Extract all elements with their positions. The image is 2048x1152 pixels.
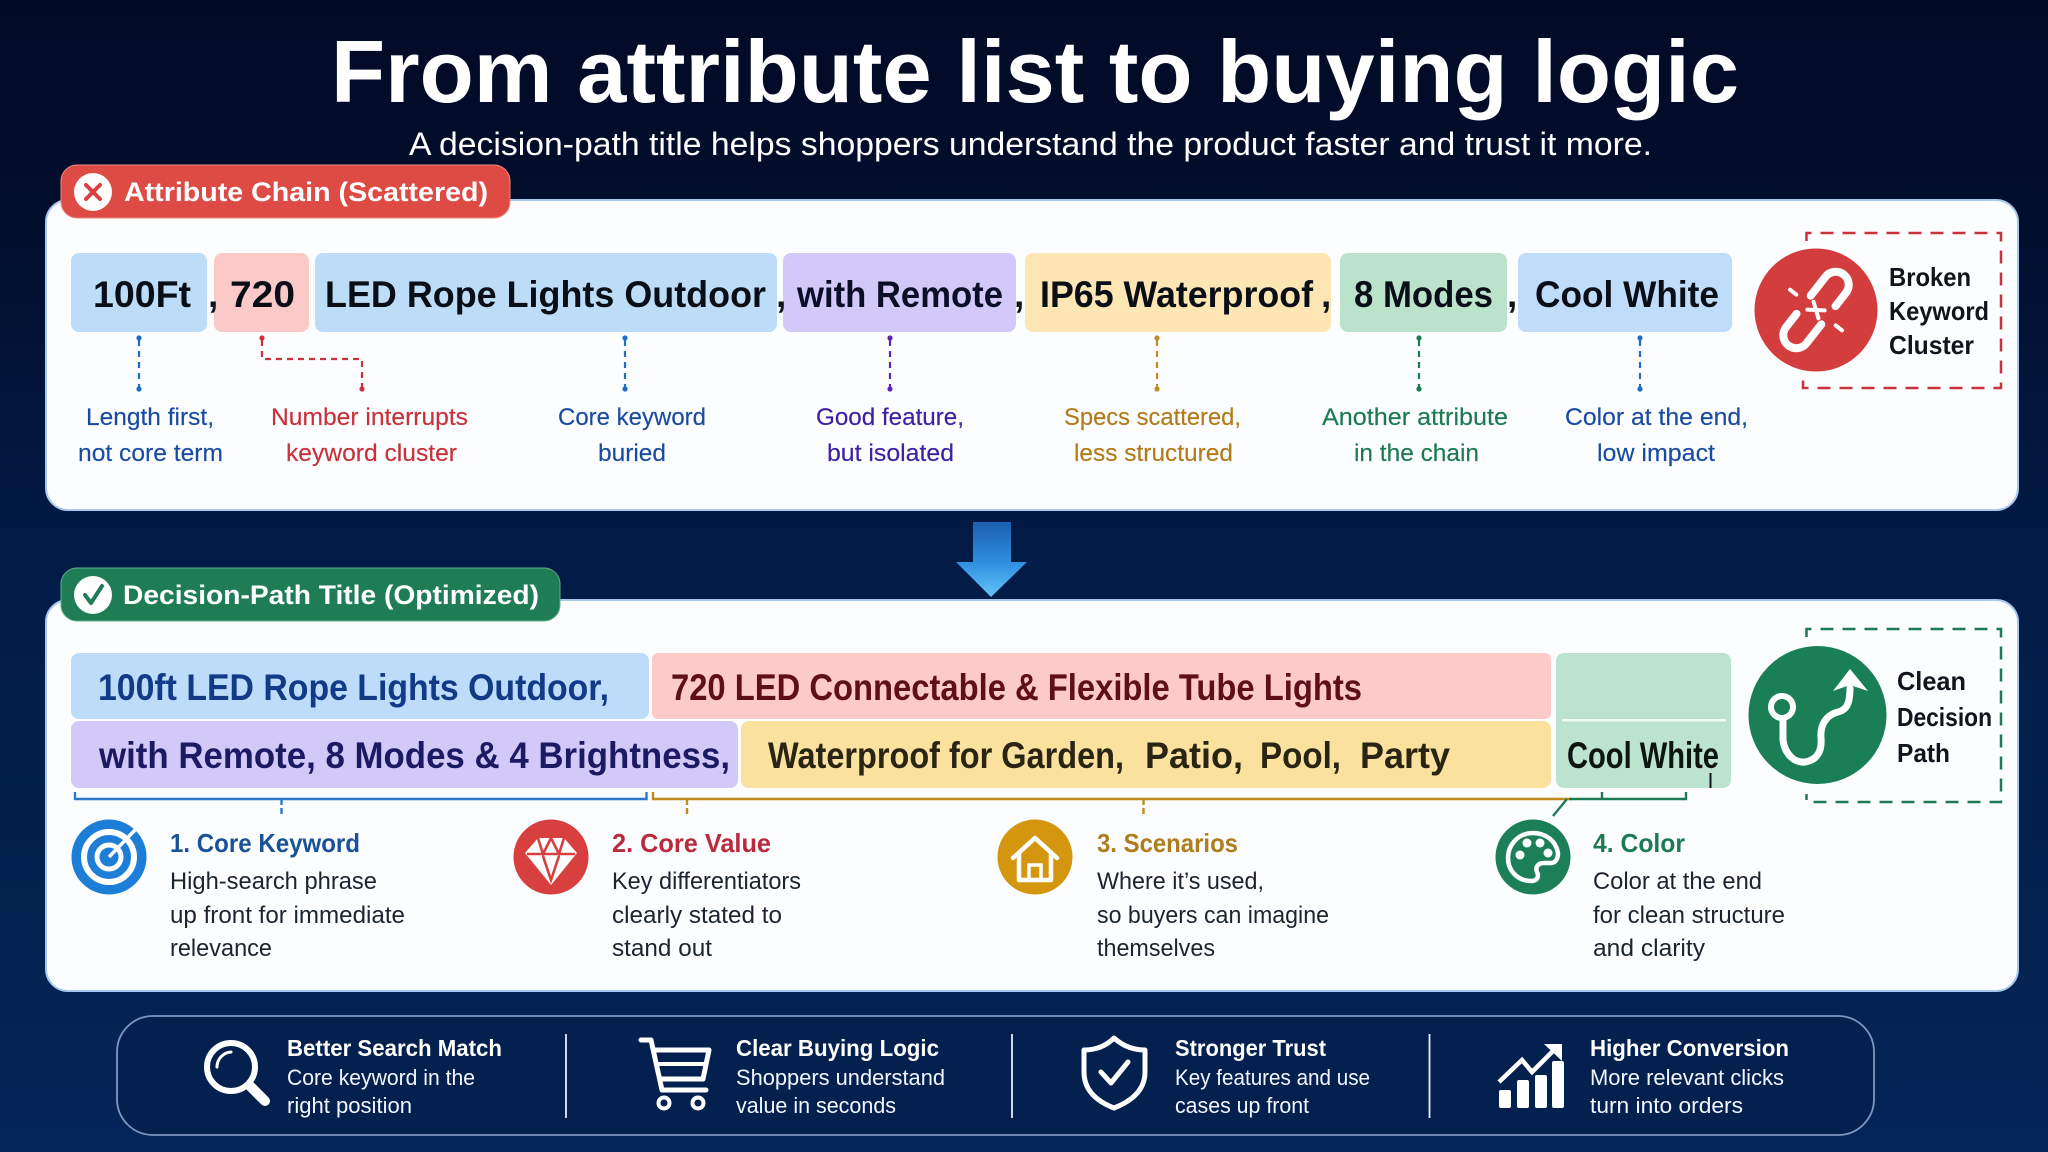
item: core value: stand out xyxy=(612,935,712,962)
icon: winding path xyxy=(1748,646,1886,784)
benefit: clear buying logic xyxy=(641,1035,945,1118)
optimized title blocks: 720 LED Connectable & Flexible Tube Lights xyxy=(671,667,1362,708)
callout: clean decision path: Decision xyxy=(1897,702,1992,732)
optimized title blocks: with Remote, 8 Modes & 4 Brightness, xyxy=(98,735,730,776)
item: core keyword xyxy=(72,820,405,962)
annotation: number interrupts: Number interrupts xyxy=(271,404,468,431)
attribute chips: 720 xyxy=(230,274,295,315)
callout: broken keyword cluster xyxy=(1754,233,2001,388)
annotation: specs scattered xyxy=(1064,404,1241,467)
annotation: core keyword: buried xyxy=(598,440,666,467)
icon: cart xyxy=(641,1040,709,1108)
callout: broken keyword cluster: Cluster xyxy=(1889,330,1974,360)
title: From attribute list to buying logic xyxy=(331,22,1739,121)
item: scenarios xyxy=(998,820,1329,962)
annotation: specs scattered: less structured xyxy=(1074,440,1233,467)
panel: attribute chain xyxy=(46,165,2018,510)
annotation: core keyword xyxy=(558,404,706,467)
item: core value: Key differentiators xyxy=(612,868,801,895)
attribute chips: with Remote xyxy=(796,274,1003,315)
item: core value: clearly stated to xyxy=(612,902,782,929)
optimized title blocks: Patio, xyxy=(1145,735,1243,776)
badge: decision-path title optimized xyxy=(61,568,560,621)
annotation: length first: not core term xyxy=(78,440,223,467)
annotation: good feature: Good feature, xyxy=(816,404,964,431)
annotation: color at the end: low impact xyxy=(1597,440,1715,467)
badge: decision-path title optimized: Decision-Path Title (Optimized) xyxy=(123,580,539,610)
benefit: stronger trust: cases up front xyxy=(1175,1093,1310,1118)
item: color: 4. Color xyxy=(1593,828,1685,858)
annotation: good feature xyxy=(816,404,964,467)
optimized title blocks: Cool White xyxy=(1567,735,1719,776)
panel: decision-path title xyxy=(46,568,2018,991)
benefit: stronger trust: Key features and use xyxy=(1175,1065,1370,1090)
annotation: length first: Length first, xyxy=(86,404,214,431)
item: color xyxy=(1496,820,1785,962)
dashed connectors xyxy=(136,335,1643,392)
item: core value: 2. Core Value xyxy=(612,828,771,858)
brackets xyxy=(75,792,1686,816)
callout: broken keyword cluster: Broken xyxy=(1889,262,1971,292)
annotation: core keyword: Core keyword xyxy=(558,404,706,431)
benefit: higher conversion: turn into orders xyxy=(1590,1093,1743,1118)
icon: growth chart xyxy=(1499,1044,1564,1108)
item: scenarios: Where it’s used, xyxy=(1097,868,1264,895)
attribute chips: LED Rope Lights Outdoor xyxy=(325,274,766,315)
annotation: length first xyxy=(78,404,223,467)
annotation: specs scattered: Specs scattered, xyxy=(1064,404,1241,431)
optimized title blocks: Waterproof for Garden, xyxy=(768,735,1124,776)
icon: target xyxy=(72,820,146,894)
item: color: for clean structure xyxy=(1593,902,1785,929)
icon: diamond xyxy=(514,820,588,894)
attribute chips: Cool White xyxy=(1535,274,1719,315)
item: color: Color at the end xyxy=(1593,868,1762,895)
attribute chips: , xyxy=(208,274,218,315)
benefit: clear buying logic: value in seconds xyxy=(736,1093,896,1118)
attribute chips: , xyxy=(1507,274,1517,315)
callout: broken keyword cluster: Keyword xyxy=(1889,296,1989,326)
annotation: another attribute: Another attribute xyxy=(1322,404,1508,431)
benefit: clear buying logic: Shoppers understand xyxy=(736,1065,945,1090)
callout: clean decision path: Path xyxy=(1897,738,1950,768)
benefit: clear buying logic: Clear Buying Logic xyxy=(736,1035,939,1061)
annotation: number interrupts: keyword cluster xyxy=(286,440,457,467)
panel: benefits bar xyxy=(117,1016,1874,1135)
item: color: and clarity xyxy=(1593,935,1706,962)
annotation: good feature: but isolated xyxy=(827,440,954,467)
item: core value xyxy=(514,820,801,962)
benefit: better search match: Core keyword in the xyxy=(287,1065,475,1090)
benefit: stronger trust: Stronger Trust xyxy=(1175,1035,1326,1061)
arrow: transition down xyxy=(956,522,1027,597)
item: core keyword: up front for immediate xyxy=(170,902,405,929)
annotation: color at the end: Color at the end, xyxy=(1565,404,1748,431)
optimized title blocks: 100ft LED Rope Lights Outdoor, xyxy=(98,667,609,708)
optimized title blocks xyxy=(71,653,1731,788)
annotation: number interrupts xyxy=(271,404,468,467)
annotation: color at the end xyxy=(1565,404,1748,467)
attribute chips: 8 Modes xyxy=(1354,274,1493,315)
item: core keyword: 1. Core Keyword xyxy=(170,828,360,858)
item: scenarios: so buyers can imagine xyxy=(1097,902,1329,929)
benefit: higher conversion: Higher Conversion xyxy=(1590,1035,1789,1061)
attribute chips: 100Ft xyxy=(93,274,191,315)
icon: palette xyxy=(1496,820,1570,894)
benefit: higher conversion: More relevant clicks xyxy=(1590,1065,1784,1090)
icon: broken link xyxy=(1754,248,1878,372)
badge: attribute chain scattered xyxy=(61,165,510,218)
badge: attribute chain scattered: Attribute Chain (Scattered) xyxy=(124,177,488,207)
benefit: better search match: right position xyxy=(287,1093,412,1118)
attribute chips: , xyxy=(1321,274,1331,315)
callout: clean decision path: Clean xyxy=(1897,666,1966,696)
attribute chips: , xyxy=(1014,274,1024,315)
item: scenarios: 3. Scenarios xyxy=(1097,828,1238,858)
optimized title blocks: Party xyxy=(1360,735,1450,776)
benefit: better search match: Better Search Match xyxy=(287,1035,502,1061)
item: scenarios: themselves xyxy=(1097,935,1215,962)
optimized title blocks: Pool, xyxy=(1260,735,1341,776)
benefit: higher conversion xyxy=(1499,1035,1789,1118)
callout: clean decision path xyxy=(1748,629,2001,802)
attribute chips xyxy=(71,253,1732,332)
attribute chips: , xyxy=(776,274,786,315)
item: core keyword: High-search phrase xyxy=(170,868,377,895)
annotation: another attribute xyxy=(1322,404,1508,467)
icon: magnifier xyxy=(207,1043,265,1101)
icon: shield xyxy=(1084,1038,1145,1108)
attribute chips: IP65 Waterproof xyxy=(1040,274,1314,315)
subtitle: A decision-path title helps shoppers understand the product faster and trust it more. xyxy=(409,126,1652,162)
annotation: another attribute: in the chain xyxy=(1354,440,1479,467)
icon: house xyxy=(998,820,1072,894)
item: core keyword: relevance xyxy=(170,935,272,962)
benefit: stronger trust xyxy=(1084,1035,1370,1118)
benefit: better search match xyxy=(207,1035,502,1118)
